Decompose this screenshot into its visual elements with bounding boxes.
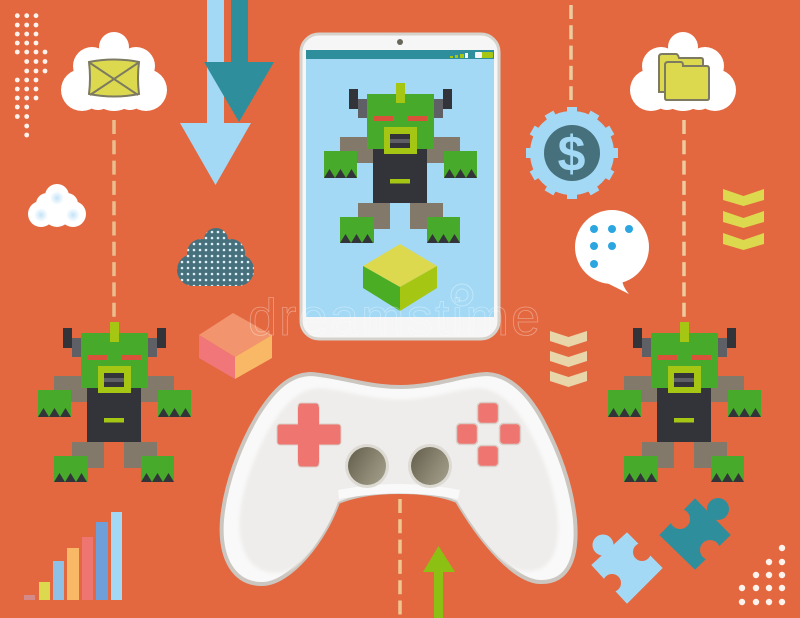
controller inner panel (239, 388, 558, 573)
icon: speech bubble (575, 210, 649, 294)
bar chart (24, 512, 122, 600)
icon: yellow chevrons (723, 189, 764, 250)
icon: beige chevrons (550, 331, 587, 387)
left thumbstick (345, 444, 389, 488)
controller body (222, 374, 576, 584)
right thumbstick (408, 444, 452, 488)
robot: right (608, 322, 761, 482)
dashed line: left cloud to robot (112, 120, 116, 318)
icon: orange cube (199, 313, 272, 379)
arrow: teal down (204, 0, 274, 122)
dashed line: right cloud to robot (682, 120, 686, 318)
d-pad (277, 403, 341, 467)
robot: on screen (324, 83, 477, 243)
icon: teal puzzle piece (660, 498, 730, 569)
dotted pattern: top left (15, 13, 47, 137)
dotted pattern: bottom right (739, 545, 785, 605)
game controller (222, 374, 576, 584)
green cube (363, 244, 437, 311)
icon: folder cloud (630, 32, 736, 111)
action buttons (456, 402, 520, 466)
bridge highlight (338, 484, 460, 499)
phone screen (306, 50, 494, 317)
watermark: dreamstime (248, 289, 540, 347)
icon: mail cloud (61, 32, 167, 111)
status bar (306, 50, 494, 59)
icon: small white cloud (28, 184, 86, 227)
icon: light blue puzzle piece (592, 533, 662, 603)
arrow: light blue down (180, 0, 251, 185)
phone body (301, 34, 499, 339)
icon: dotted dark cloud (177, 228, 254, 286)
robot: left (38, 322, 191, 482)
camera (397, 39, 403, 45)
dashed line: top to gear (569, 5, 573, 100)
phone (301, 34, 499, 339)
arrow: green up (423, 546, 455, 618)
icon: dollar gear (526, 107, 618, 199)
icon: dollar gear: $ (558, 126, 586, 182)
dashed line: controller bottom (398, 499, 402, 618)
